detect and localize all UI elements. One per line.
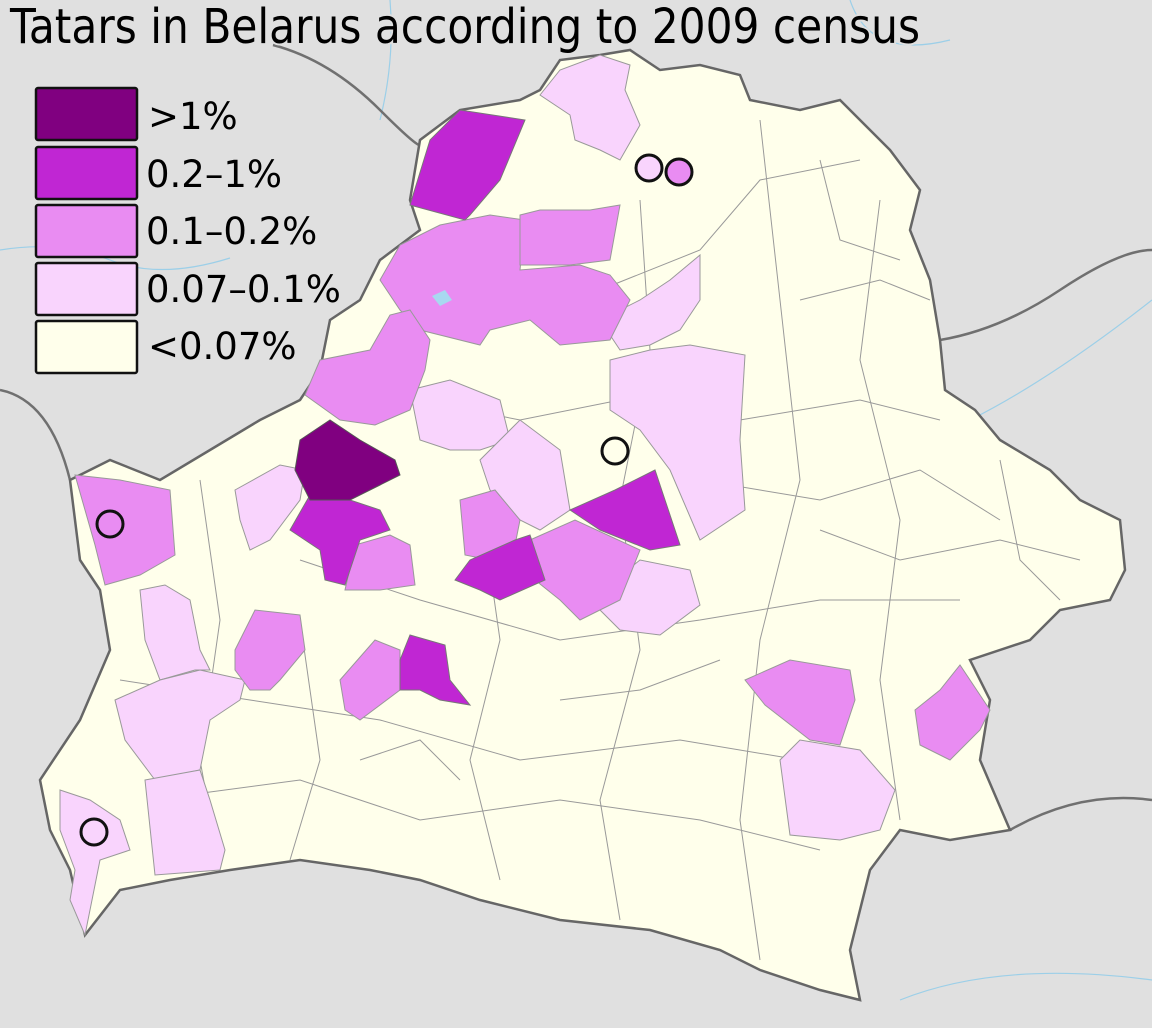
legend: >1% (148, 95, 238, 138)
region: >1% (295, 420, 400, 500)
regions: 0.2-1% (290, 110, 680, 705)
title: Tatars in Belarus according to 2009 census (9, 0, 920, 55)
regions: 0.07-0.1% (60, 55, 895, 935)
legend: <0.07% (148, 325, 297, 368)
lake (432, 290, 452, 306)
legend: 0.2–1% (146, 153, 282, 196)
regions: 0.1-0.2% (75, 205, 990, 760)
city markers (81, 155, 692, 845)
legend: 0.1–0.2% (146, 210, 317, 253)
legend (36, 88, 341, 373)
legend: 0.07–0.1% (146, 268, 341, 311)
